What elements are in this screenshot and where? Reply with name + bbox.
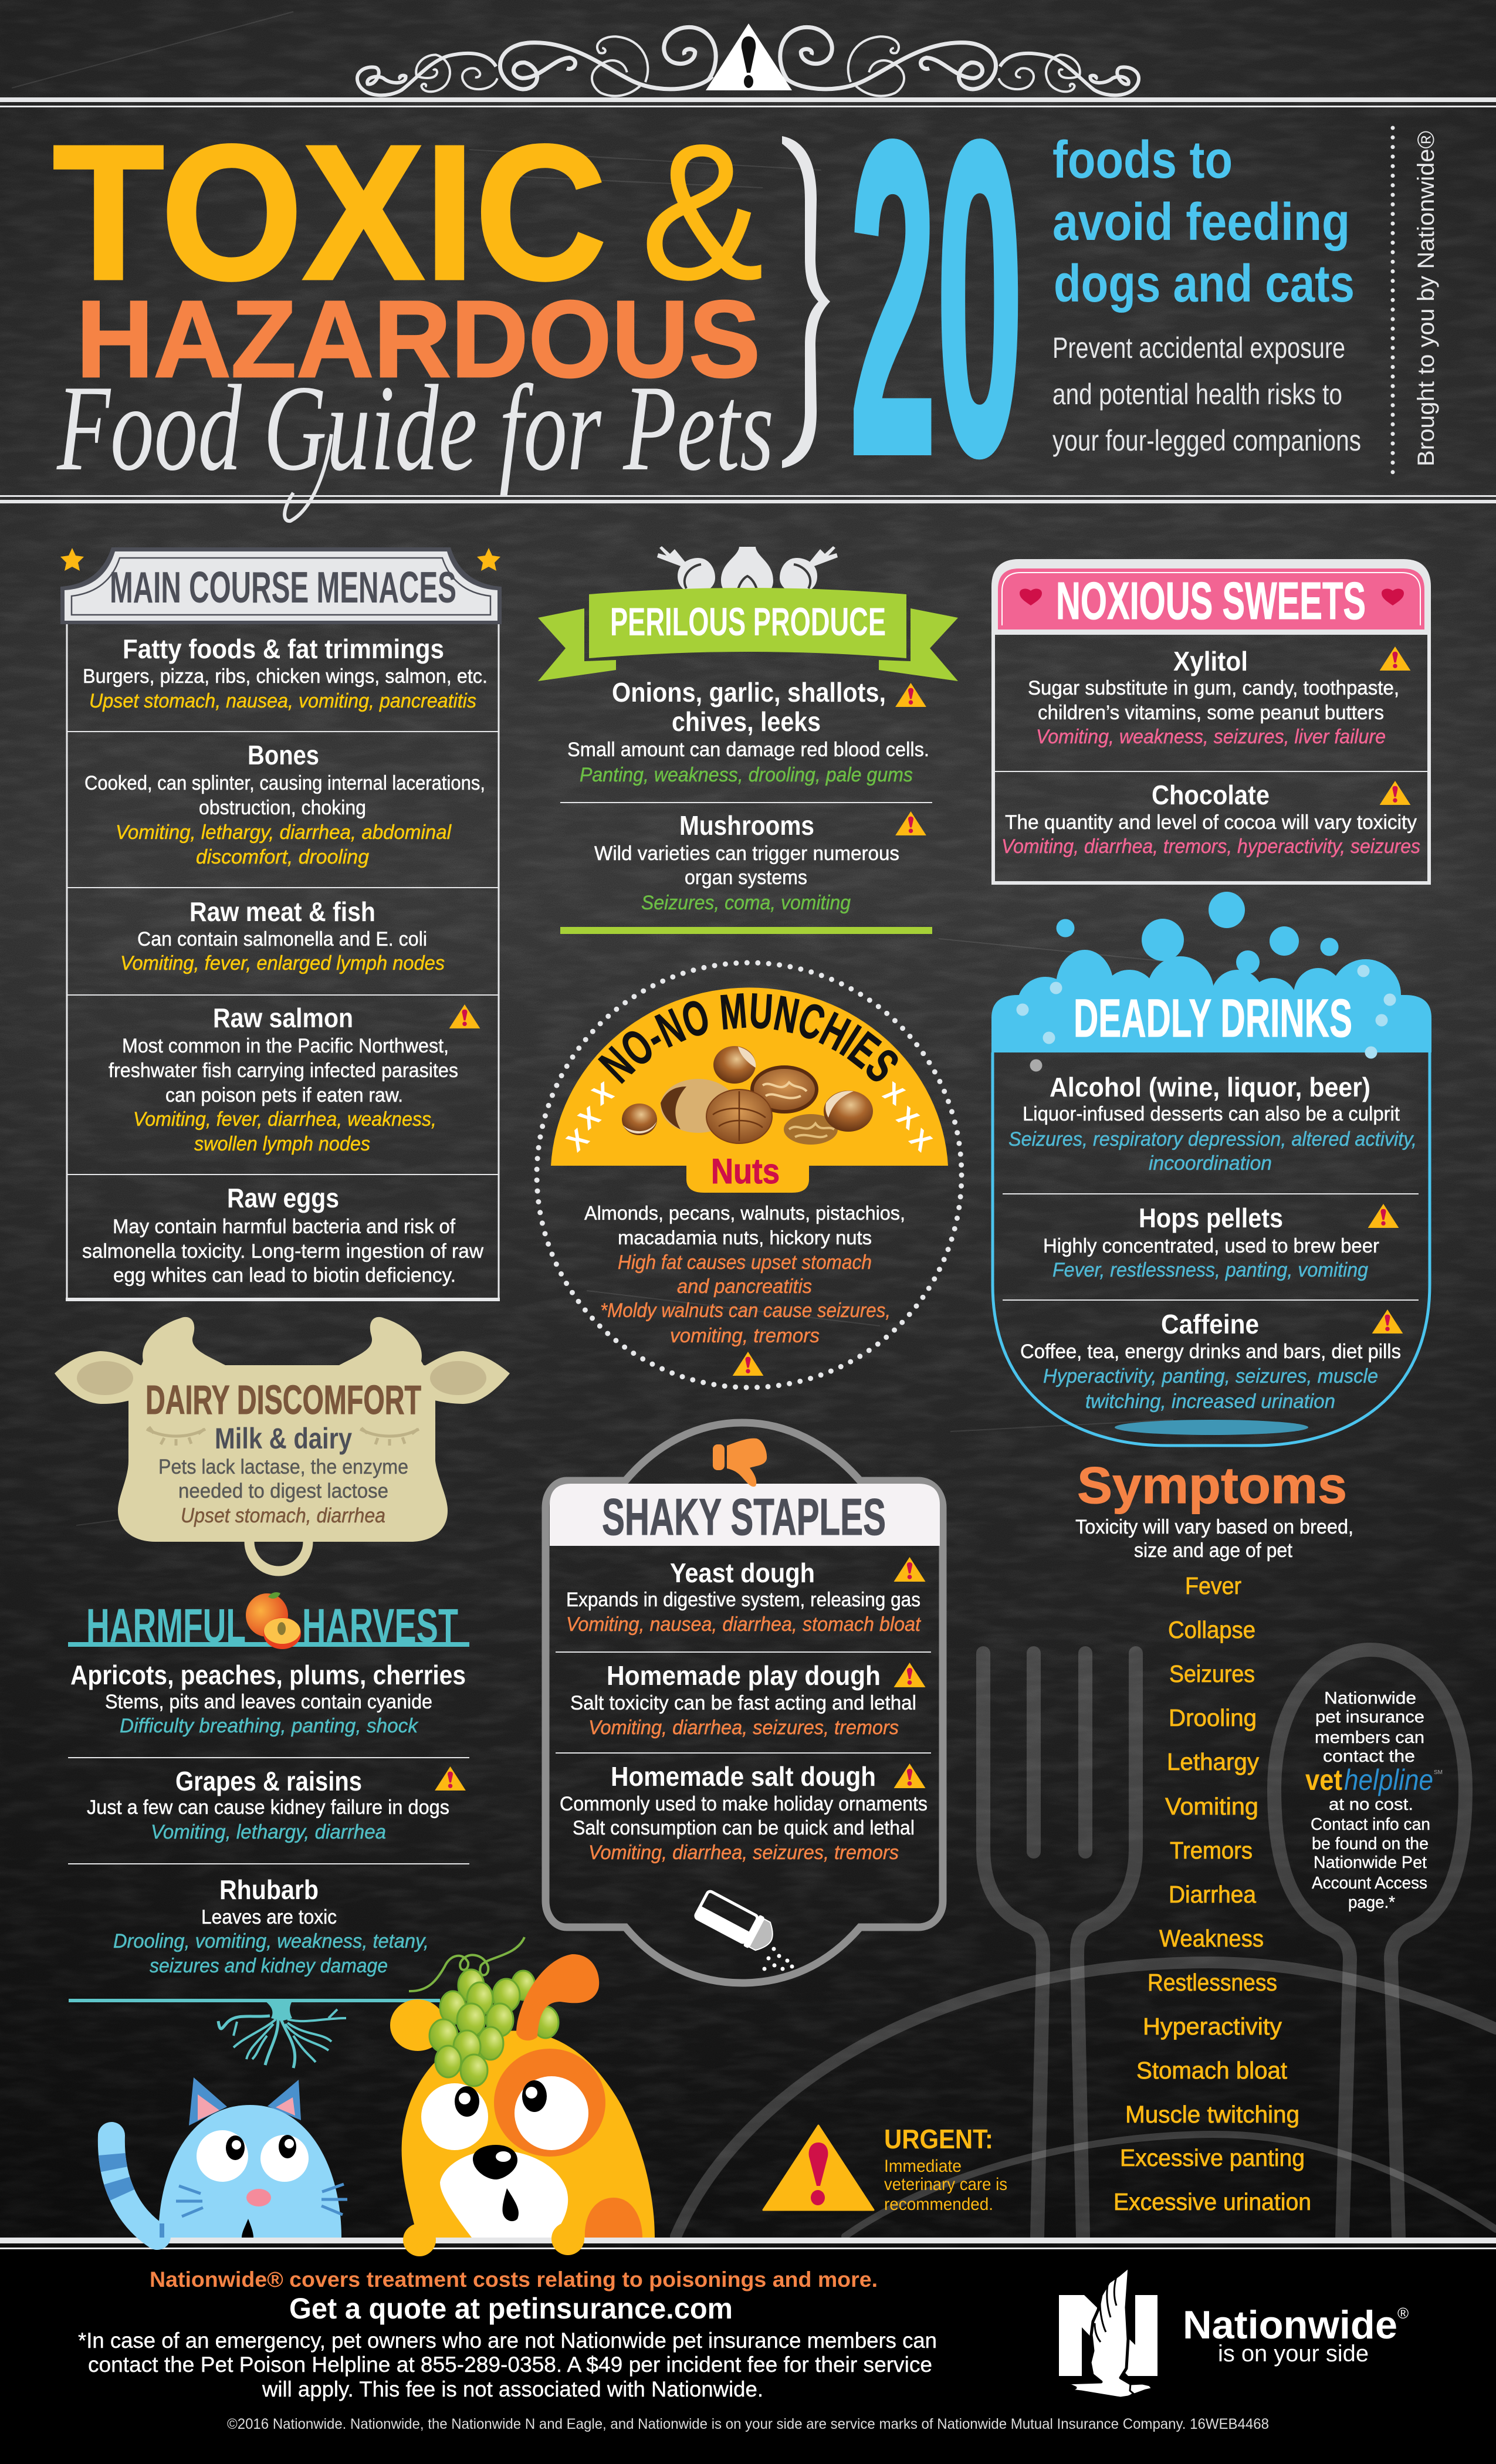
illustration: dog with grapes bbox=[390, 1937, 655, 2256]
item: hops bbox=[1043, 1203, 1399, 1281]
label: nuts: Nuts bbox=[711, 1152, 780, 1191]
text: nuts details: High fat causes upset stomach bbox=[618, 1251, 872, 1274]
icon: urgent warning bbox=[763, 2125, 874, 2210]
subtitle description bbox=[1052, 331, 1361, 457]
subtitle description: and potential health risks to bbox=[1052, 378, 1342, 411]
list: symptoms: Collapse bbox=[1168, 1616, 1255, 1643]
item: raw salmon: Most common in the Pacific Northwest, bbox=[122, 1035, 449, 1057]
icon: thumbs down bbox=[713, 1439, 767, 1487]
text: milk and dairy: Milk & dairy bbox=[215, 1422, 352, 1455]
icon: hearts bbox=[1020, 589, 1404, 605]
item: alcohol: incoordination bbox=[1149, 1152, 1272, 1175]
heading: shaky staples: SHAKY STAPLES bbox=[602, 1488, 886, 1546]
callout: vethelpline: page.* bbox=[1348, 1893, 1395, 1912]
item: raw eggs: egg whites can lead to biotin deficiency. bbox=[113, 1264, 456, 1287]
item: bones: Bones bbox=[248, 740, 319, 770]
text: urgent: recommended. bbox=[884, 2195, 993, 2214]
header lower rules bbox=[0, 495, 1496, 503]
item: rhubarb: Rhubarb bbox=[219, 1874, 319, 1905]
item: raw salmon: can poison pets if eaten raw. bbox=[165, 1084, 403, 1106]
footer rules bbox=[0, 2238, 1496, 2249]
item: homemade salt dough: Vomiting, diarrhea, seizures, tremors bbox=[588, 1842, 899, 1864]
callout: vethelpline: Nationwide bbox=[1324, 1689, 1416, 1708]
item: grapes: Vomiting, lethargy, diarrhea bbox=[151, 1821, 386, 1843]
item: onions and garlic bbox=[567, 677, 929, 786]
item: yeast dough: Expands in digestive system, releasing gas bbox=[566, 1589, 920, 1611]
callout: vethelpline: pet insurance bbox=[1315, 1708, 1424, 1727]
heading dome: X bbox=[587, 1075, 619, 1111]
item: caffeine: Hyperactivity, panting, seizures, muscle bbox=[1043, 1365, 1378, 1387]
footer text: contact the Pet Poison Helpline at 855-289-0358. A $49 per incident fee for their service bbox=[88, 2353, 932, 2377]
logo: nationwide wordmark: ® bbox=[1397, 2304, 1409, 2322]
text: urgent: URGENT: bbox=[884, 2124, 993, 2154]
cow head shape bbox=[55, 1317, 510, 1542]
title: toxic and hazardous food guide for pets: Food Guide for Pets bbox=[56, 360, 774, 496]
item: xylitol: Xylitol bbox=[1173, 646, 1248, 676]
subtitle: foods to avoid bbox=[1052, 131, 1355, 313]
subtitle: foods to avoid: avoid feeding bbox=[1052, 193, 1350, 252]
list: symptoms: Tremors bbox=[1170, 1837, 1253, 1864]
icon: peach bbox=[246, 1592, 301, 1649]
heading: harmful harvest: HARMFUL bbox=[86, 1599, 246, 1653]
list: symptoms: Seizures bbox=[1169, 1660, 1255, 1687]
item: onions and garlic: chives, leeks bbox=[672, 706, 821, 737]
item: rhubarb: Leaves are toxic bbox=[201, 1906, 337, 1928]
item: mushrooms: Mushrooms bbox=[679, 810, 814, 841]
callout: vethelpline: vet bbox=[1305, 1764, 1342, 1796]
item: hops: Highly concentrated, used to brew beer bbox=[1043, 1235, 1379, 1257]
heading banner: PERILOUS PRODUCE bbox=[610, 600, 886, 644]
callout: vethelpline: Nationwide Pet bbox=[1314, 1853, 1427, 1872]
item: homemade play dough: Homemade play dough bbox=[607, 1660, 881, 1691]
subtitle description: Prevent accidental exposure bbox=[1052, 331, 1345, 364]
list: symptoms: Vomiting bbox=[1165, 1793, 1258, 1820]
item: xylitol bbox=[1028, 646, 1410, 748]
panel: harmful harvest bbox=[68, 1592, 469, 2068]
footer text: will apply. This fee is not associated with Nationwide. bbox=[262, 2377, 763, 2401]
list: symptoms: Muscle twitching bbox=[1125, 2101, 1299, 2128]
item: alcohol: Seizures, respiratory depression, altered activity, bbox=[1008, 1128, 1417, 1150]
list: symptoms: Diarrhea bbox=[1169, 1881, 1256, 1908]
item: chocolate bbox=[1001, 780, 1420, 858]
heading dome: X bbox=[573, 1100, 605, 1135]
icon: foam bubbles bbox=[991, 892, 1431, 1071]
item: fatty foods: Burgers, pizza, ribs, chicken wings, salmon, etc. bbox=[83, 665, 488, 688]
item: homemade salt dough bbox=[560, 1761, 928, 1864]
item: raw eggs bbox=[82, 1183, 483, 1287]
item: bones: Cooked, can splinter, causing internal lacerations, bbox=[84, 772, 485, 794]
heading: main course menaces: MAIN COURSE MENACES bbox=[110, 563, 456, 612]
panel: no-no munchies bbox=[534, 960, 964, 1390]
heading: dairy discomfort: DAIRY DISCOMFORT bbox=[145, 1377, 421, 1423]
text: nuts details: and pancreatitis bbox=[677, 1275, 812, 1298]
callout: vethelpline: Account Access bbox=[1312, 1874, 1427, 1893]
list: symptoms: Excessive panting bbox=[1120, 2144, 1305, 2171]
title: toxic and hazardous food guide for pets: HAZARDOUS bbox=[76, 279, 760, 400]
item: onions and garlic: Panting, weakness, drooling, pale gums bbox=[580, 764, 913, 786]
footer text: ©2016 Nationwide. Nationwide, the Nationwide N and Eagle, and Nationwide is on your side are service marks of Nationwide Mutual Insurance Company. 16WEB4468 bbox=[227, 2416, 1269, 2432]
text: urgent bbox=[884, 2124, 1007, 2214]
callout: vethelpline: at no cost. bbox=[1329, 1795, 1413, 1814]
brought to you by: Brought to you by Nationwide® bbox=[1413, 131, 1439, 466]
item: xylitol: Vomiting, weakness, seizures, liver failure bbox=[1036, 726, 1386, 748]
item: apricots bbox=[70, 1660, 466, 1737]
item: rhubarb: Drooling, vomiting, weakness, tetany, bbox=[113, 1930, 429, 1952]
logo: nationwide wordmark: is on your side bbox=[1218, 2341, 1369, 2367]
glass outline bbox=[993, 1052, 1430, 1446]
item: homemade salt dough: Commonly used to make holiday ornaments bbox=[560, 1793, 928, 1815]
item: grapes bbox=[87, 1766, 466, 1843]
icon: ground line and roots bbox=[69, 1999, 440, 2068]
list: symptoms: Lethargy bbox=[1167, 1748, 1259, 1775]
glass base bbox=[1115, 1420, 1308, 1435]
list: symptoms: Stomach bloat bbox=[1136, 2057, 1288, 2084]
callout: urgent bbox=[763, 2124, 1007, 2214]
item: onions and garlic: Onions, garlic, shallots, bbox=[612, 677, 886, 708]
heading: harmful harvest: HARVEST bbox=[302, 1599, 458, 1653]
heading: main course menaces bbox=[60, 547, 502, 624]
item: bones: obstruction, choking bbox=[199, 797, 366, 819]
icon: nose ring bbox=[249, 1512, 308, 1571]
item: mushrooms bbox=[594, 810, 926, 914]
subtitle: foods to avoid: foods to bbox=[1052, 131, 1233, 189]
item: caffeine: Caffeine bbox=[1161, 1309, 1259, 1339]
callout: vethelpline: helpline bbox=[1344, 1764, 1433, 1796]
footer text: Nationwide® covers treatment costs relating to poisonings and more. bbox=[150, 2267, 878, 2292]
text: milk and dairy bbox=[158, 1422, 408, 1527]
item: xylitol: children’s vitamins, some peanut butters bbox=[1038, 702, 1384, 724]
text: milk and dairy: Pets lack lactase, the enzyme bbox=[158, 1456, 408, 1478]
callout: vethelpline: Contact info can bbox=[1311, 1815, 1430, 1834]
item: homemade play dough: Vomiting, diarrhea, seizures, tremors bbox=[588, 1717, 899, 1739]
item: onions and garlic: Small amount can damage red blood cells. bbox=[567, 739, 929, 761]
item: mushrooms: Wild varieties can trigger numerous bbox=[594, 842, 899, 865]
item: grapes: Just a few can cause kidney failure in dogs bbox=[87, 1796, 449, 1819]
heading: symptoms: Symptoms bbox=[1077, 1456, 1347, 1514]
panel: perilous produce bbox=[538, 546, 958, 934]
background cutlery: fork, spoon and plate bbox=[676, 1650, 1496, 2236]
footer text: *In case of an emergency, pet owners who are not Nationwide pet insurance members can bbox=[78, 2328, 937, 2353]
logo: nationwide wordmark: Nationwide bbox=[1183, 2303, 1397, 2347]
item: grapes: Grapes & raisins bbox=[175, 1766, 362, 1796]
list: symptoms: Hyperactivity bbox=[1143, 2013, 1282, 2040]
list: symptoms: Restlessness bbox=[1148, 1969, 1277, 1996]
item: chocolate: The quantity and level of cocoa will vary toxicity bbox=[1005, 811, 1417, 834]
item: alcohol: Alcohol (wine, liquor, beer) bbox=[1050, 1072, 1370, 1102]
brace bbox=[782, 136, 830, 468]
item: raw salmon: Raw salmon bbox=[213, 1003, 353, 1033]
text: toxicity note: Toxicity will vary based on breed, bbox=[1075, 1516, 1353, 1538]
frame bbox=[546, 1423, 943, 1983]
item: apricots: Difficulty breathing, panting, shock bbox=[120, 1715, 419, 1737]
logo: nationwide wordmark bbox=[1183, 2303, 1409, 2367]
callout: vethelpline bbox=[1305, 1689, 1443, 1912]
text: toxicity note: size and age of pet bbox=[1134, 1539, 1293, 1562]
heading banner bbox=[538, 588, 958, 681]
footer text: Get a quote at petinsurance.com bbox=[289, 2292, 733, 2325]
list: symptoms: Fever bbox=[1185, 1572, 1241, 1599]
item: raw eggs: May contain harmful bacteria and risk of bbox=[113, 1216, 456, 1238]
text: toxicity note bbox=[1075, 1516, 1353, 1562]
heading: shaky staples bbox=[550, 1484, 940, 1546]
title: toxic and hazardous food guide for pets: & bbox=[641, 103, 764, 320]
item: fatty foods bbox=[83, 634, 488, 712]
text: 20 bbox=[849, 51, 1023, 546]
icon: nuts bbox=[622, 1046, 873, 1145]
item: caffeine bbox=[1020, 1309, 1403, 1413]
item: raw meat and fish: Can contain salmonella and E. coli bbox=[137, 928, 427, 950]
title: toxic and hazardous food guide for pets bbox=[53, 103, 774, 521]
item: bones: discomfort, drooling bbox=[196, 846, 369, 868]
icon: grapes bbox=[409, 1937, 559, 2086]
item: raw salmon: Vomiting, fever, diarrhea, weakness, bbox=[133, 1108, 436, 1131]
panel: shaky staples bbox=[546, 1423, 943, 1983]
text: milk and dairy: Upset stomach, diarrhea bbox=[181, 1504, 385, 1527]
item: chocolate: Vomiting, diarrhea, tremors, hyperactivity, seizures bbox=[1001, 835, 1420, 858]
item: homemade salt dough: Salt consumption can be quick and lethal bbox=[573, 1817, 915, 1839]
text: urgent: veterinary care is bbox=[884, 2175, 1007, 2194]
item: mushrooms: Seizures, coma, vomiting bbox=[641, 892, 851, 914]
list: symptoms: Weakness bbox=[1159, 1925, 1264, 1952]
panel: dairy discomfort bbox=[55, 1317, 510, 1571]
footer text bbox=[78, 2267, 1269, 2432]
item: caffeine: Coffee, tea, energy drinks and bars, diet pills bbox=[1020, 1341, 1401, 1363]
heading: harmful harvest bbox=[68, 1599, 469, 1653]
callout: vethelpline: be found on the bbox=[1312, 1835, 1429, 1853]
item: homemade play dough: Salt toxicity can be fast acting and lethal bbox=[570, 1692, 916, 1714]
item: rhubarb bbox=[113, 1874, 429, 1977]
item: rhubarb: seizures and kidney damage bbox=[150, 1955, 388, 1977]
list: symptoms bbox=[1113, 1572, 1311, 2215]
top ornament with warning triangle bbox=[0, 23, 1496, 107]
heading dome bbox=[551, 987, 948, 1193]
item: mushrooms: organ systems bbox=[685, 867, 807, 889]
item: bones bbox=[84, 740, 485, 868]
icon: salt shaker bbox=[693, 1888, 794, 1971]
panel: symptoms bbox=[1075, 1456, 1353, 2215]
item: chocolate: Chocolate bbox=[1152, 780, 1270, 810]
heading dome: NO-NO MUNCHIES bbox=[598, 993, 898, 1084]
item: raw salmon bbox=[109, 1003, 480, 1155]
item: yeast dough bbox=[566, 1557, 926, 1636]
subtitle: foods to avoid: dogs and cats bbox=[1054, 255, 1355, 313]
logo: nationwide eagle bbox=[1059, 2266, 1157, 2398]
item: apricots: Stems, pits and leaves contain cyanide bbox=[105, 1691, 432, 1713]
item: yeast dough: Yeast dough bbox=[670, 1558, 815, 1588]
text: nuts details: Almonds, pecans, walnuts, pistachios, bbox=[584, 1202, 905, 1224]
callout: vethelpline: contact the bbox=[1323, 1747, 1415, 1766]
subtitle description: your four-legged companions bbox=[1052, 424, 1361, 457]
panel: main course menaces bbox=[60, 547, 502, 1301]
item: raw salmon: freshwater fish carrying infected parasites bbox=[109, 1060, 458, 1082]
item: raw salmon: swollen lymph nodes bbox=[194, 1133, 370, 1155]
text: milk and dairy: needed to digest lactose bbox=[178, 1480, 388, 1502]
text: nuts details: vomiting, tremors bbox=[670, 1325, 820, 1347]
item: homemade play dough bbox=[570, 1660, 926, 1739]
heading dome: X bbox=[892, 1100, 925, 1136]
item: raw meat and fish: Vomiting, fever, enlarged lymph nodes bbox=[120, 952, 445, 974]
panel: noxious sweets bbox=[993, 561, 1429, 883]
item: raw meat and fish bbox=[120, 896, 445, 974]
list: symptoms: Excessive urination bbox=[1113, 2188, 1311, 2215]
icon: onions and garlic bbox=[657, 546, 838, 598]
icon: eyelashes bbox=[147, 1427, 419, 1446]
item: yeast dough: Vomiting, nausea, diarrhea, stomach bloat bbox=[566, 1613, 921, 1636]
list: symptoms: Drooling bbox=[1169, 1704, 1257, 1731]
item: apricots: Apricots, peaches, plums, cherries bbox=[70, 1660, 466, 1690]
text: urgent: Immediate bbox=[884, 2157, 962, 2176]
title: toxic and hazardous food guide for pets: TOXIC bbox=[53, 106, 607, 320]
item: homemade salt dough: Homemade salt dough bbox=[611, 1761, 876, 1792]
item: alcohol: Liquor-infused desserts can also be a culprit bbox=[1023, 1103, 1400, 1125]
item: fatty foods: Fatty foods & fat trimmings bbox=[123, 634, 444, 664]
item: bones: Vomiting, lethargy, diarrhea, abdominal bbox=[116, 821, 452, 844]
icon: warning bbox=[733, 1352, 763, 1376]
item: xylitol: Sugar substitute in gum, candy, toothpaste, bbox=[1028, 677, 1399, 699]
footer black band bbox=[0, 2249, 1496, 2464]
item: hops: Hops pellets bbox=[1139, 1203, 1283, 1233]
callout: vethelpline: members can bbox=[1315, 1728, 1424, 1747]
item: raw meat and fish: Raw meat & fish bbox=[189, 896, 375, 927]
text: nuts details: macadamia nuts, hickory nuts bbox=[618, 1227, 872, 1248]
illustration: cat bbox=[111, 2077, 347, 2238]
heading dome: X bbox=[904, 1123, 938, 1157]
item: alcohol bbox=[1008, 1072, 1417, 1175]
item: raw eggs: Raw eggs bbox=[227, 1183, 339, 1213]
heading dome: X bbox=[878, 1076, 910, 1111]
item: raw eggs: salmonella toxicity. Long-term ingestion of raw bbox=[82, 1240, 483, 1263]
text: nuts details bbox=[584, 1202, 905, 1347]
panel: deadly drinks bbox=[991, 892, 1431, 1446]
item: hops: Fever, restlessness, panting, vomiting bbox=[1052, 1259, 1368, 1281]
item: caffeine: twitching, increased urination bbox=[1085, 1390, 1335, 1413]
text: nuts details: *Moldy walnuts can cause seizures, bbox=[600, 1299, 891, 1322]
item: fatty foods: Upset stomach, nausea, vomiting, pancreatitis bbox=[89, 690, 476, 712]
heading dome: X bbox=[560, 1122, 594, 1157]
callout: vethelpline: SM bbox=[1434, 1769, 1443, 1776]
